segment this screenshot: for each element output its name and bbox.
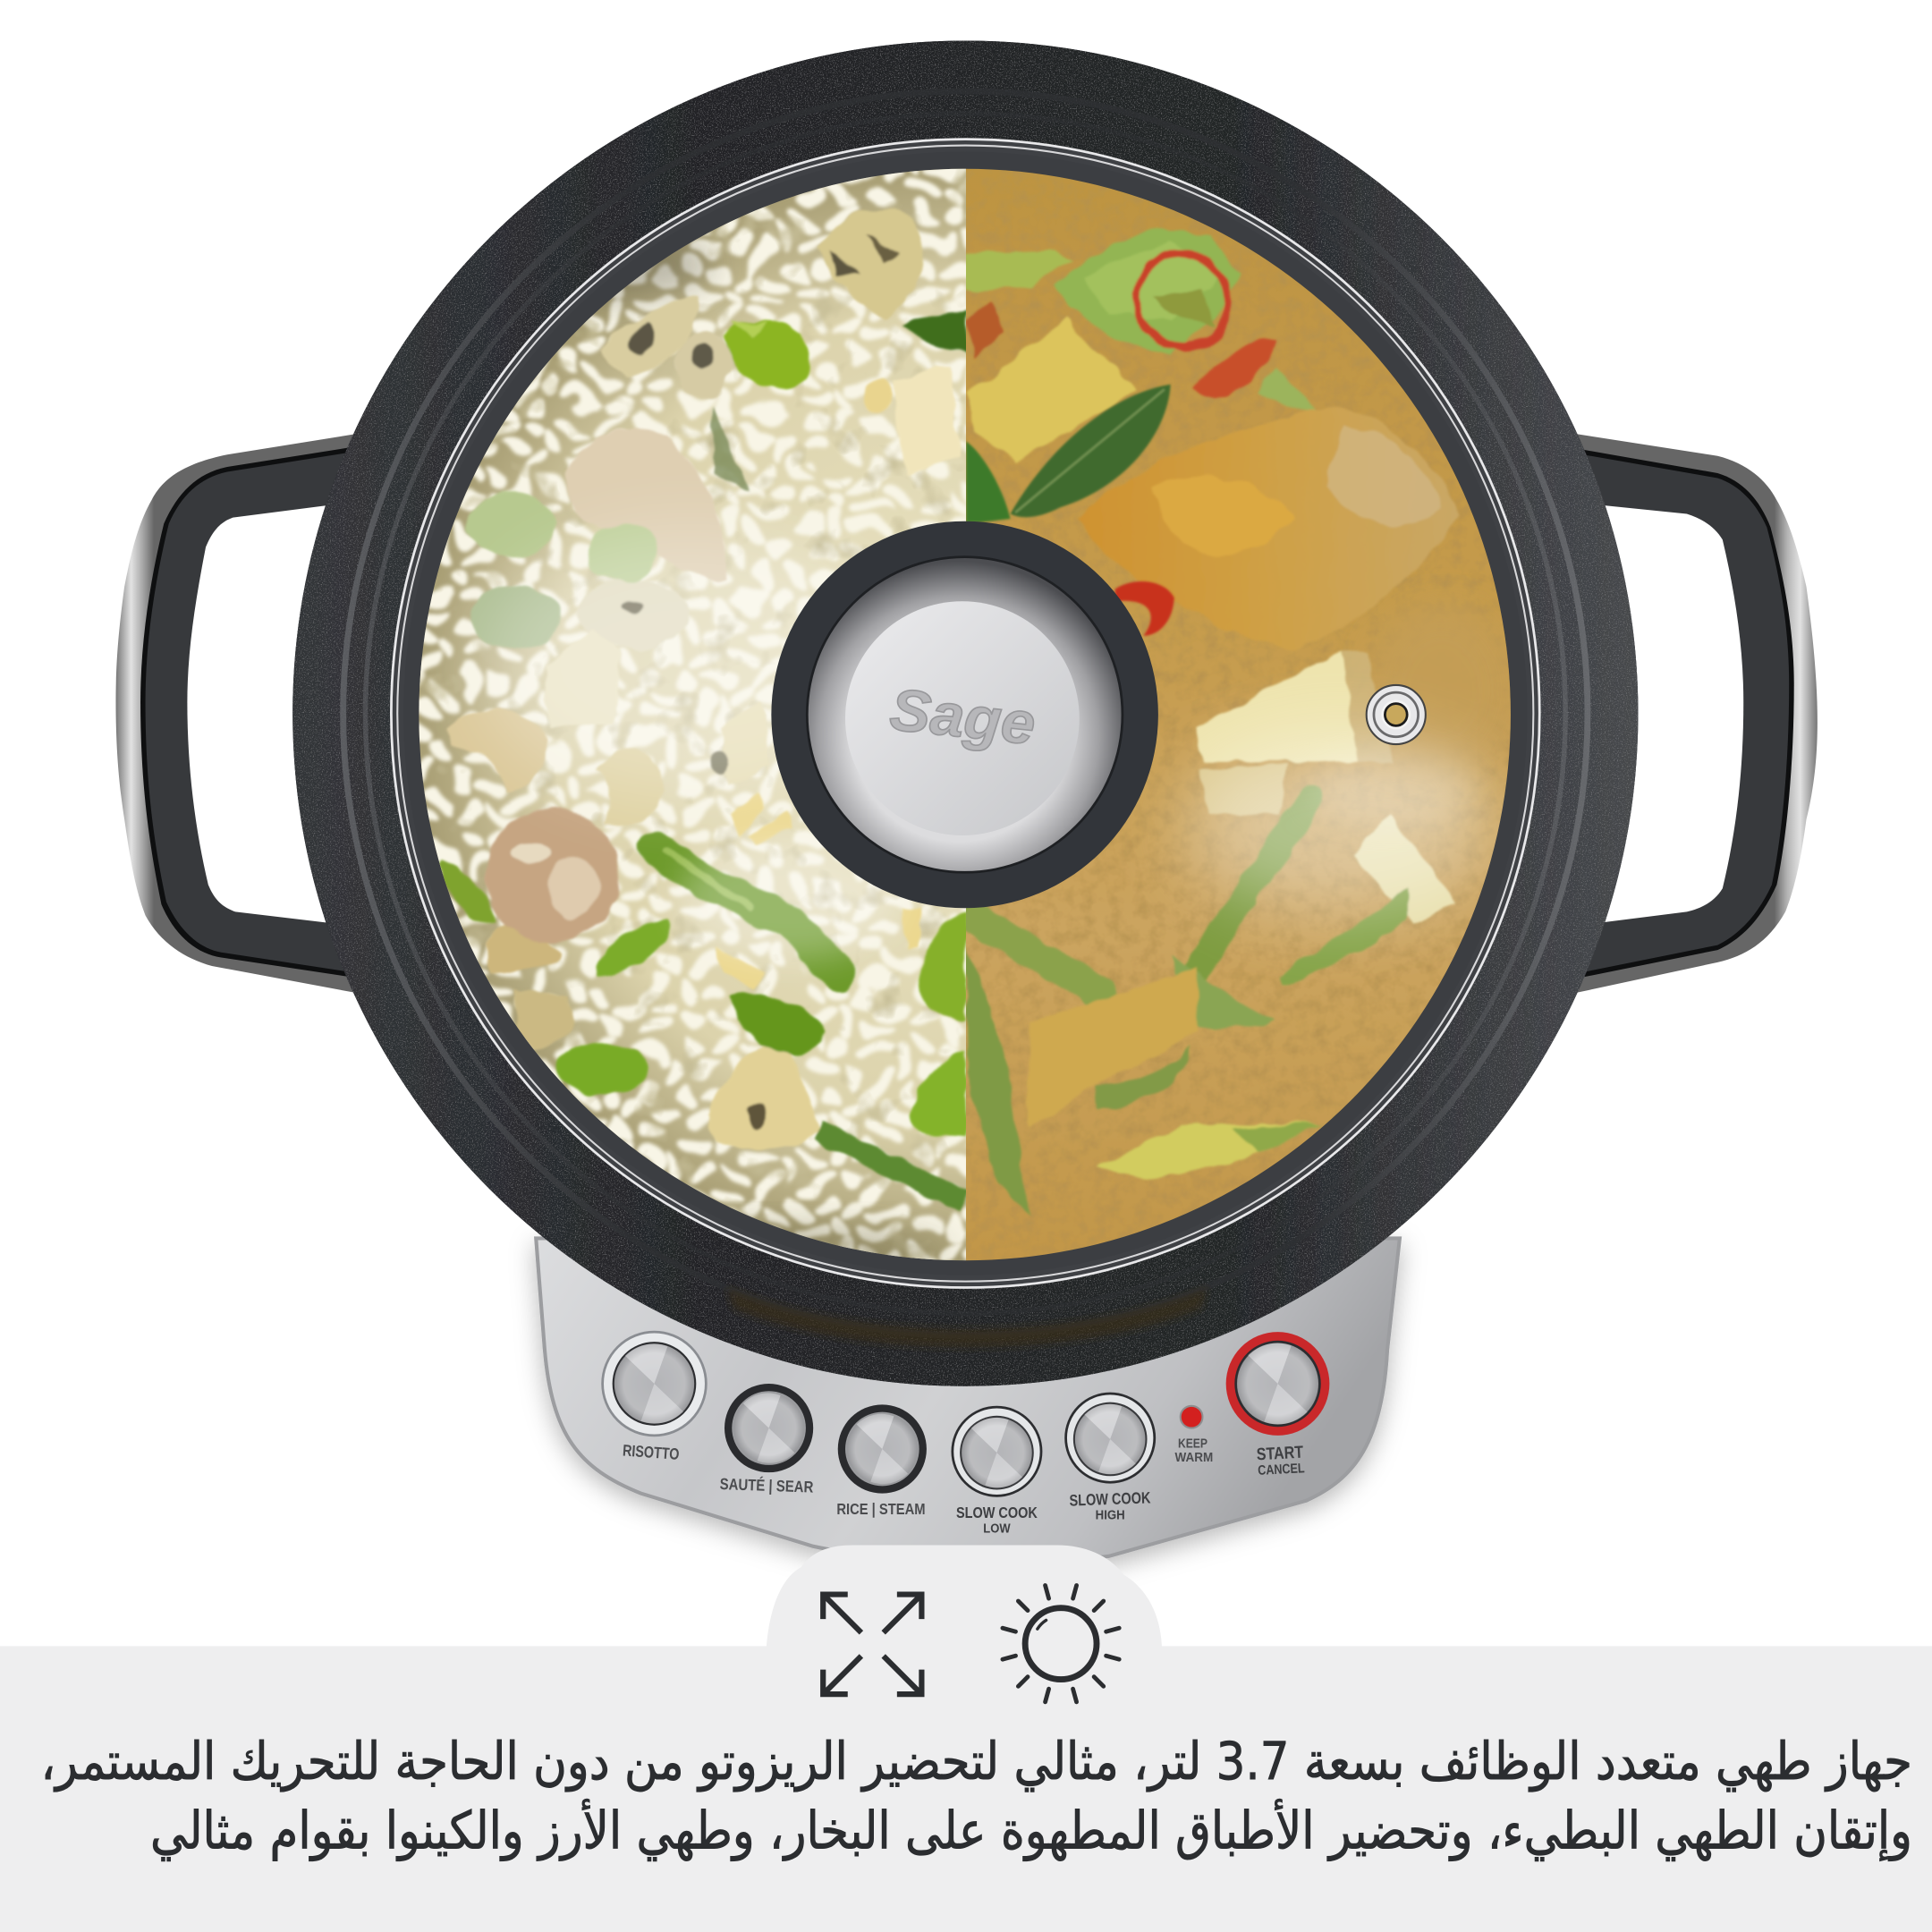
beans and peas	[438, 308, 966, 1202]
button labels: HIGH	[1096, 1508, 1125, 1523]
button: slow cook high	[1066, 1394, 1155, 1482]
indicator: keep warm led	[1181, 1406, 1202, 1428]
nuts and chunks	[716, 363, 961, 988]
button labels: RICE | STEAM	[836, 1500, 926, 1518]
description text: جهاز طهي متعدد الوظائف بسعة 3.7 لتر، مثالي لتحضير الريزوتو من دون الحاجة للتحريك المستمر،	[40, 1731, 1912, 1792]
bay leaf and chili	[966, 385, 1174, 636]
left handle	[115, 434, 357, 993]
risotto ingredients	[438, 209, 966, 1202]
button: rice steam	[838, 1404, 927, 1494]
curry ingredients	[966, 231, 1459, 1214]
food: rice half and curry half	[419, 168, 1511, 1261]
chicken pieces	[486, 428, 727, 941]
lid reflection near bottom	[727, 1288, 1208, 1347]
appliance: steel control base	[536, 1238, 1400, 1563]
button labels: CANCEL	[1258, 1461, 1305, 1479]
button: saute sear	[724, 1384, 813, 1472]
panel: curry half	[966, 160, 1525, 1269]
mushrooms	[450, 209, 923, 1149]
lid knob	[771, 521, 1158, 908]
steam haze	[480, 530, 900, 801]
pot rim	[292, 40, 1638, 1386]
right handle	[1575, 434, 1818, 993]
icon: expand arrows	[823, 1595, 921, 1694]
button labels: SLOW COOK	[1069, 1488, 1151, 1510]
description text	[40, 1731, 1912, 1861]
icon: sun	[1003, 1585, 1119, 1702]
button: risotto	[603, 1332, 706, 1436]
button labels: WARM	[1174, 1451, 1213, 1465]
button: slow cook low	[953, 1407, 1041, 1496]
bottom info band	[0, 1545, 1932, 1932]
panel: risotto half	[357, 111, 1022, 1318]
button: start cancel	[1226, 1332, 1329, 1436]
button labels	[622, 1437, 1305, 1537]
button labels: START	[1256, 1444, 1304, 1464]
button labels: SLOW COOK	[956, 1504, 1038, 1521]
knob logo: Sage	[887, 677, 1038, 758]
button labels: LOW	[983, 1521, 1011, 1537]
steam haze	[1182, 740, 1504, 911]
button labels: KEEP	[1178, 1437, 1208, 1452]
steam vent	[1367, 685, 1426, 744]
button labels: SAUTÉ | SEAR	[719, 1474, 814, 1496]
button labels: RISOTTO	[622, 1441, 680, 1463]
